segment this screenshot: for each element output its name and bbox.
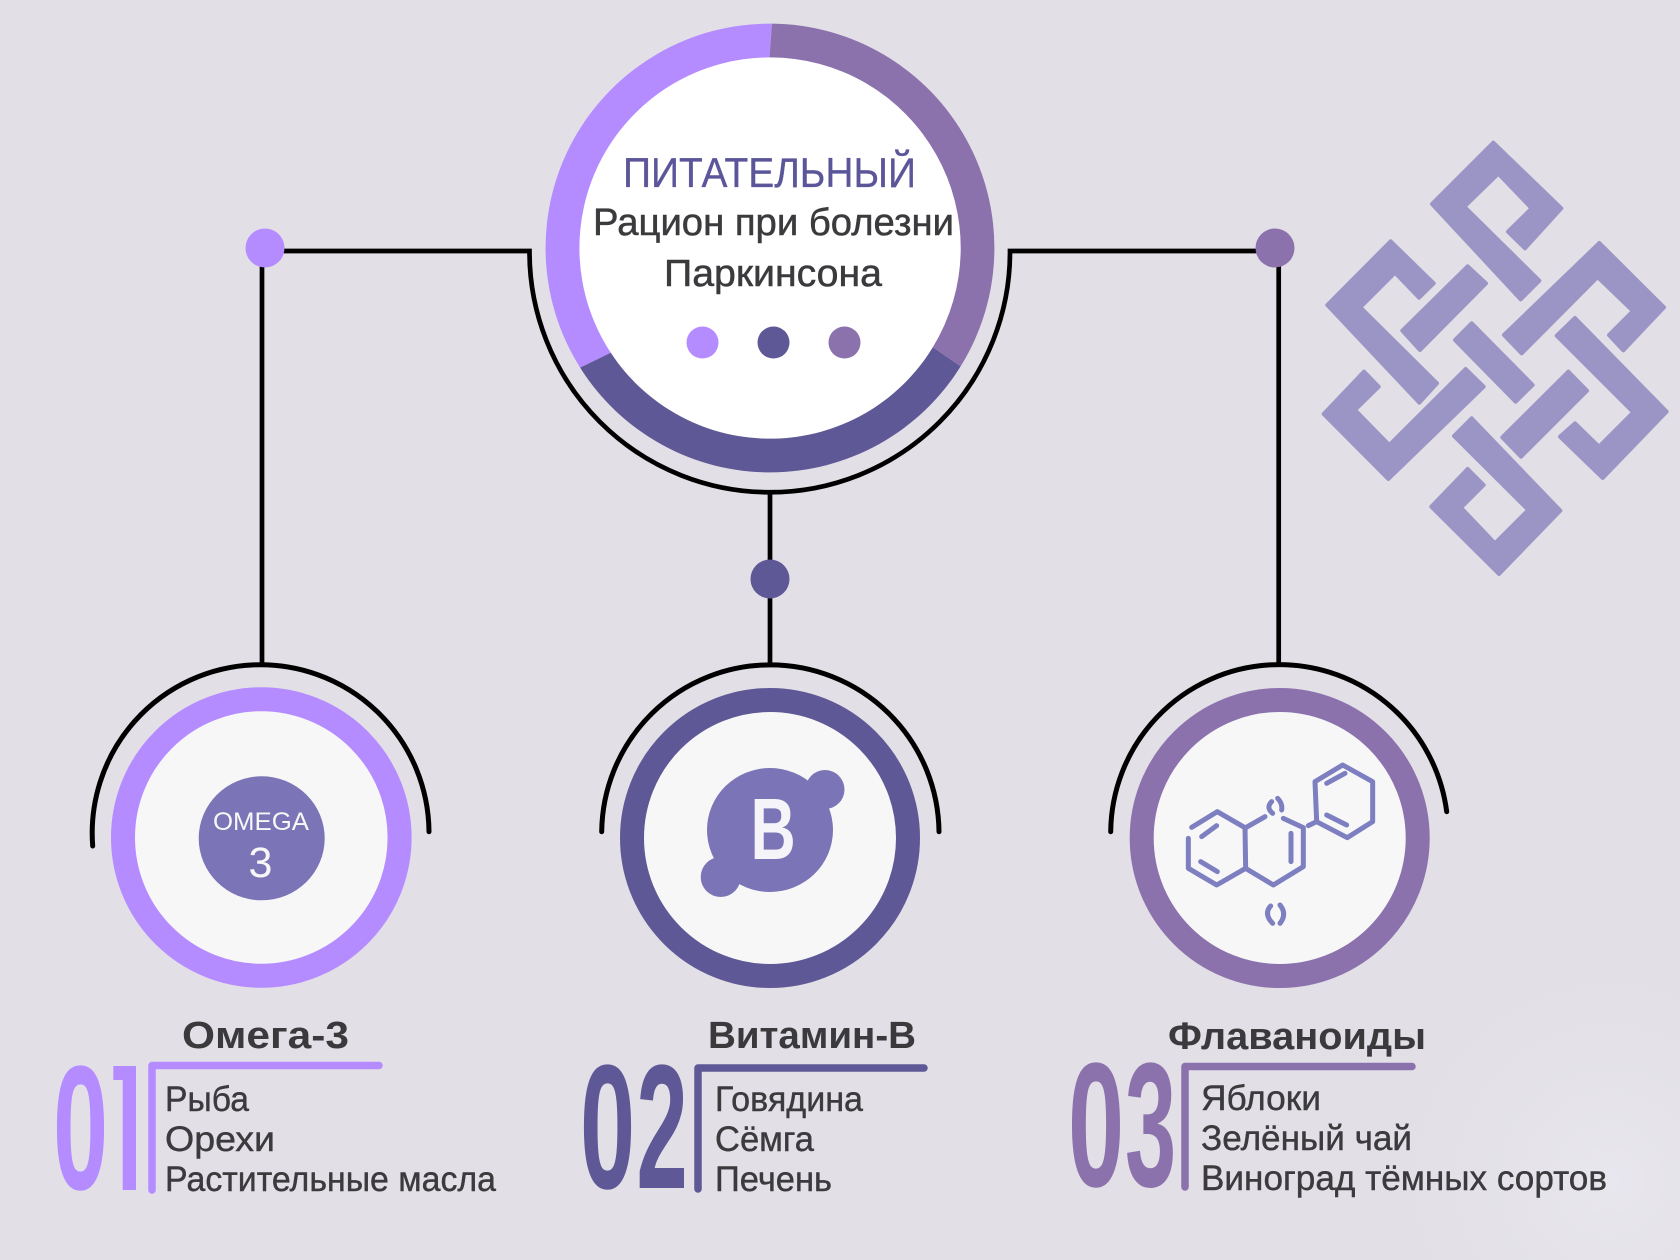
title: main heading: ПИТАТЕЛЬНЫЙ bbox=[623, 148, 916, 196]
number 03: 0 bbox=[1068, 1026, 1124, 1224]
number 01: 0 bbox=[53, 1030, 108, 1227]
icon: omega 3 badge: 3 bbox=[249, 839, 272, 887]
list: flavonoid sources bbox=[1201, 1079, 1607, 1198]
icon: vitamin B blob: B bbox=[750, 781, 796, 879]
panel: flavonoids text block bbox=[1068, 1016, 1607, 1224]
title: subtitle line two: Паркинсона bbox=[664, 253, 883, 295]
bracket rule bbox=[152, 1066, 379, 1190]
panel: flavonoid circle bbox=[1111, 665, 1447, 976]
connector dot: centre bbox=[750, 560, 790, 598]
number 01 bbox=[53, 1030, 136, 1227]
list: omega-3 sources: Рыба bbox=[165, 1080, 250, 1119]
list: flavonoid sources: Зелёный чай bbox=[1201, 1119, 1412, 1158]
list: omega-3 sources: Орехи bbox=[165, 1120, 275, 1159]
list: omega-3 sources bbox=[165, 1080, 497, 1199]
connector dot: left bbox=[246, 228, 284, 268]
icon: omega 3 badge: OMEGA bbox=[213, 808, 309, 836]
panel: omega-3 circle bbox=[92, 665, 429, 976]
bracket rule bbox=[1185, 1066, 1412, 1187]
list: vitamin B sources: Печень bbox=[715, 1160, 832, 1199]
list: flavonoid sources: Виноград тёмных сортов bbox=[1201, 1159, 1607, 1198]
bracket rule bbox=[698, 1068, 924, 1189]
panel: vitamin B text block bbox=[580, 1015, 924, 1226]
connector lines bbox=[262, 248, 1279, 666]
icon: omega 3 badge bbox=[199, 776, 325, 900]
icon: endless knot bbox=[1324, 143, 1667, 574]
number 02: 0 bbox=[580, 1029, 635, 1226]
list: vitamin B sources bbox=[715, 1080, 864, 1199]
list: vitamin B sources: Говядина bbox=[715, 1080, 864, 1119]
three accent dots bbox=[686, 326, 860, 358]
heading: omega-3: Омега-3 bbox=[182, 1015, 349, 1057]
list: flavonoid sources: Яблоки bbox=[1201, 1079, 1321, 1118]
panel: central title circle bbox=[546, 24, 994, 472]
panel: vitamin B circle bbox=[602, 665, 939, 976]
panel: omega-3 text block bbox=[53, 1015, 497, 1227]
list: omega-3 sources: Растительные масла bbox=[165, 1160, 497, 1199]
connector dot: right bbox=[1256, 228, 1294, 268]
title: subtitle line one: Рацион при болезни bbox=[593, 202, 954, 244]
number 02: 2 bbox=[636, 1027, 688, 1226]
number 02 bbox=[580, 1027, 688, 1226]
heading: flavonoids: Флаваноиды bbox=[1168, 1016, 1426, 1058]
number 03: 3 bbox=[1125, 1025, 1176, 1224]
number 03 bbox=[1068, 1025, 1176, 1224]
icon: vitamin B blob bbox=[701, 768, 844, 897]
icon: flavonoid molecule bbox=[1188, 765, 1373, 923]
list: vitamin B sources: Сёмга bbox=[715, 1120, 815, 1159]
heading: vitamin B: Витамин-В bbox=[708, 1015, 916, 1057]
